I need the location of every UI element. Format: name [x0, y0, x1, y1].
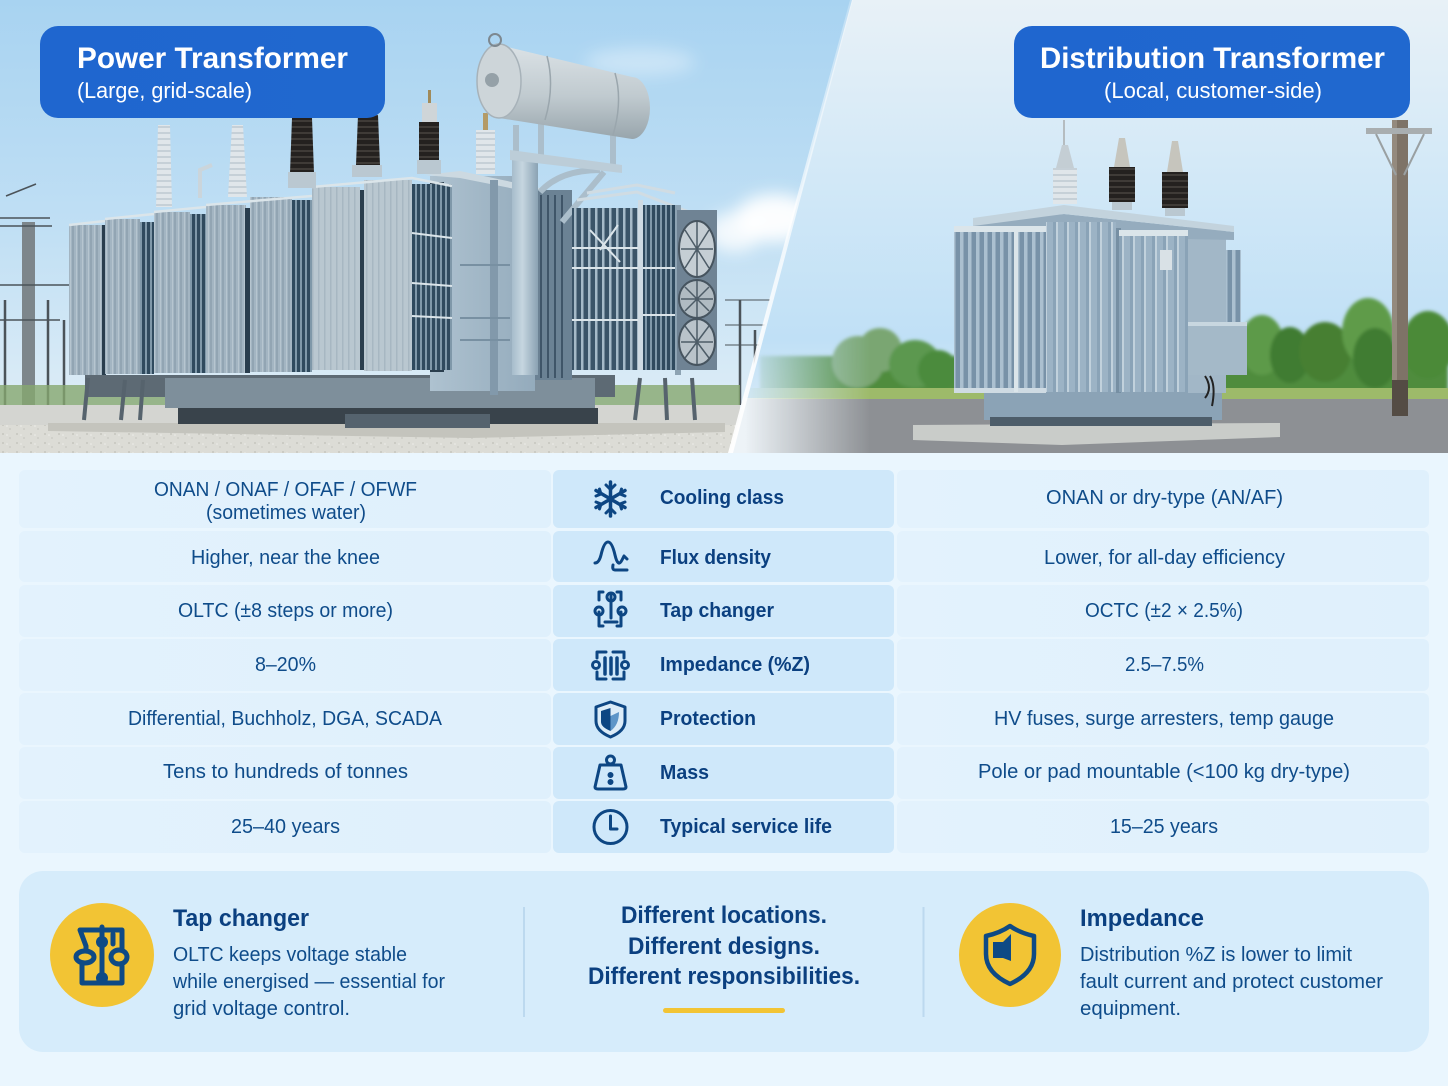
badge: power transformer: [40, 26, 385, 118]
parameter labels: Cooling class: [660, 487, 784, 509]
icon: protection shield: [596, 702, 625, 737]
power transformer values: [128, 479, 443, 838]
main tank: [424, 171, 572, 395]
right radiators and fans: [572, 185, 717, 375]
parameter labels: Tap changer: [660, 600, 774, 622]
heading: Impedance: [1080, 905, 1204, 932]
body text: fault current and protect customer: [1080, 971, 1383, 993]
power transformer values: Higher, near the knee: [191, 547, 380, 569]
distribution transformer values: HV fuses, surge arresters, temp gauge: [994, 708, 1334, 730]
distribution transformer values: ONAN or dry-type (AN/AF): [1046, 487, 1283, 509]
panel: bottom callouts: [19, 871, 1429, 1052]
panel: distribution transformer photo: [746, 50, 1448, 453]
power transformer values: OLTC (±8 steps or more): [178, 600, 393, 622]
parameter labels: Protection: [660, 708, 756, 730]
row cells: distribution column: [897, 470, 1429, 853]
conservator tank: [477, 34, 650, 139]
parameter labels: Impedance (%Z): [660, 654, 810, 676]
body text: grid voltage control.: [173, 998, 350, 1020]
row cells: power column: [19, 470, 551, 853]
body text: Distribution %Z is lower to limit: [1080, 944, 1352, 966]
clouds: [585, 48, 815, 252]
icon: flux density curve: [595, 542, 627, 570]
panel: power transformer photo: [0, 0, 860, 453]
steel base: [84, 375, 695, 428]
icon: clock: [594, 810, 627, 844]
power transformer values: 25–40 years: [231, 816, 340, 838]
ground: [0, 385, 740, 453]
parameter labels: Mass: [660, 762, 709, 784]
power transformer values: 8–20%: [255, 654, 316, 676]
bushings: [1053, 120, 1188, 216]
tagline: Different designs.: [628, 933, 820, 960]
body text: while energised — essential for: [172, 971, 445, 993]
parameter labels: Typical service life: [660, 816, 832, 838]
tagline: Different responsibilities.: [588, 963, 860, 990]
distribution transformer values: 15–25 years: [1110, 816, 1218, 838]
icon: impedance: [592, 652, 628, 679]
support frame and pipe: [510, 112, 622, 375]
diagonal divider: [728, 0, 853, 453]
badge: distribution transformer: [1014, 26, 1410, 118]
power transformer values: ONAN / ONAF / OFAF / OFWF: [154, 479, 417, 501]
icon: shield badge: [959, 903, 1061, 1007]
tagline: [588, 902, 860, 1013]
body text: OLTC keeps voltage stable: [173, 944, 407, 966]
icon: snowflake: [596, 482, 625, 516]
badge: distribution transformer: (Local, customer-side): [1104, 78, 1322, 103]
body text: [172, 944, 445, 1020]
body text: equipment.: [1080, 998, 1181, 1020]
transformer body: [913, 205, 1280, 445]
badge: distribution transformer: Distribution Transformer: [1040, 42, 1385, 75]
landscape: trees, grass and asphalt: [720, 298, 1448, 453]
distribution transformer values: Pole or pad mountable (<100 kg dry-type): [978, 761, 1350, 783]
distribution transformer values: Lower, for all-day efficiency: [1044, 547, 1285, 569]
parameter labels: [660, 487, 832, 838]
distribution transformer values: OCTC (±2 × 2.5%): [1085, 600, 1243, 622]
badge: power transformer: Power Transformer: [77, 42, 348, 75]
callout: tap changer: [50, 903, 445, 1020]
background pylons: [0, 184, 770, 406]
distribution transformer values: [978, 487, 1350, 838]
power transformer values: (sometimes water): [206, 502, 366, 524]
utility pole: [1366, 120, 1432, 416]
body text: [1080, 944, 1383, 1020]
parameter labels: Flux density: [660, 547, 772, 569]
comparison table: [19, 470, 1429, 853]
icon: tap changer: [595, 592, 626, 626]
badge: power transformer: (Large, grid-scale): [77, 78, 252, 103]
heading: Tap changer: [173, 905, 309, 932]
distribution transformer values: 2.5–7.5%: [1125, 654, 1204, 676]
bushings: [156, 90, 495, 207]
power transformer values: Tens to hundreds of tonnes: [163, 761, 408, 783]
tagline: Different locations.: [621, 902, 827, 929]
row cells: parameter column: [553, 470, 894, 853]
icon: tap changer badge: [50, 903, 154, 1007]
radiator banks: [69, 178, 452, 375]
icon: mass weight: [595, 756, 626, 789]
callout: impedance: [959, 903, 1383, 1020]
power transformer values: Differential, Buchholz, DGA, SCADA: [128, 708, 443, 730]
